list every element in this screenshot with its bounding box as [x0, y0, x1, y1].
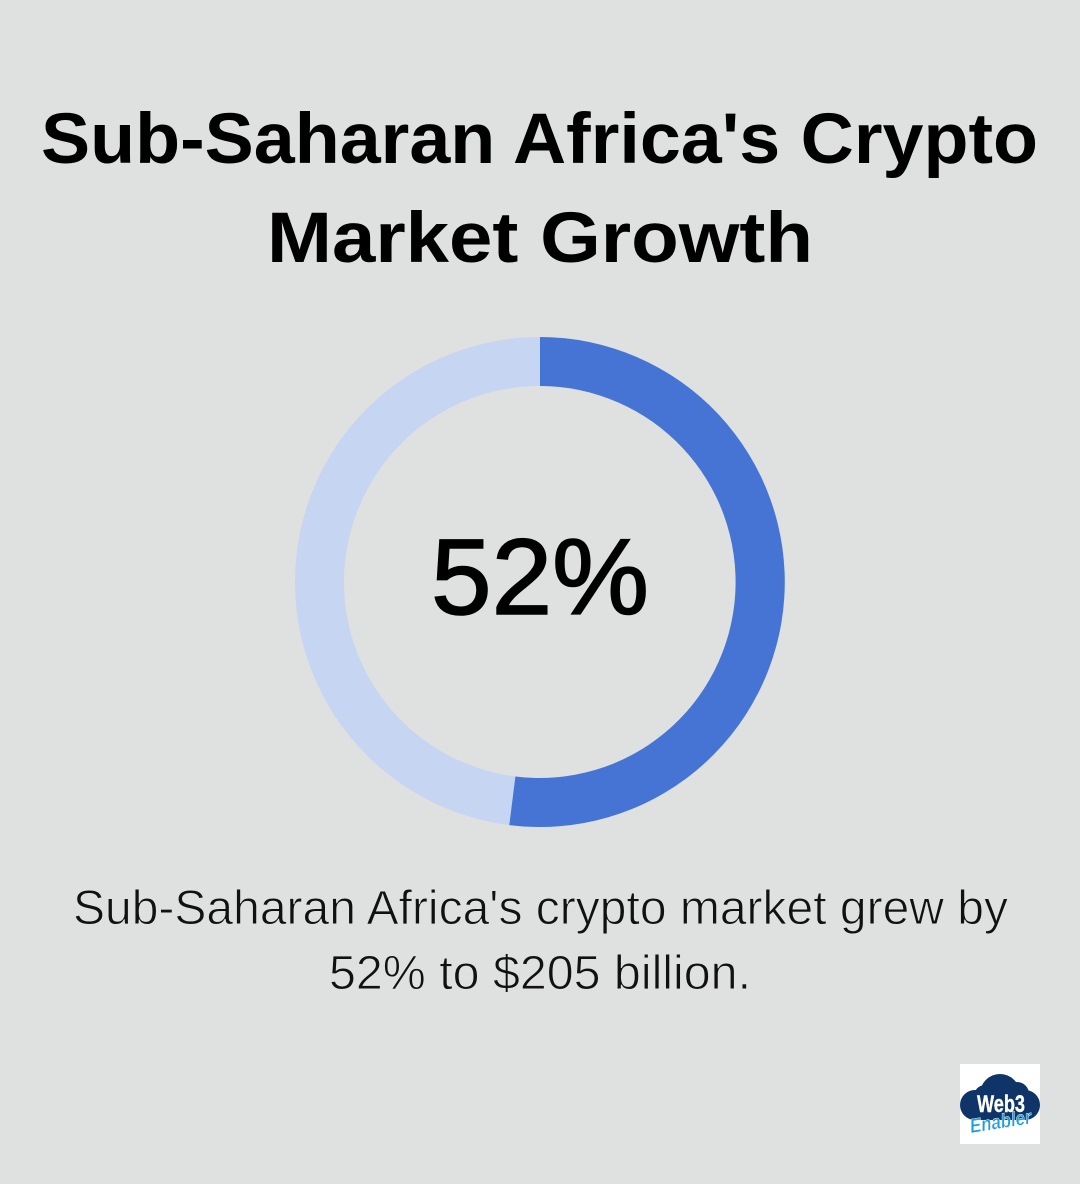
logo: Web3 Enabler [960, 1064, 1040, 1144]
title [41, 100, 1038, 278]
title: Market Growth [267, 199, 813, 278]
donut chart: 52% [320, 337, 785, 827]
center value: 52% [431, 516, 649, 637]
donut value arc [509, 337, 785, 827]
description text: Sub-Saharan Africa's crypto market grew by [73, 882, 1008, 935]
logo script: Enabler [968, 1106, 1034, 1138]
donut track [320, 362, 760, 802]
description text [73, 882, 1008, 1000]
description text: 52% to $205 billion. [329, 947, 751, 1000]
title: Sub-Saharan Africa's Crypto [41, 100, 1038, 179]
logo wordmark: Web3 [977, 1091, 1025, 1118]
logo cloud [960, 1074, 1040, 1120]
